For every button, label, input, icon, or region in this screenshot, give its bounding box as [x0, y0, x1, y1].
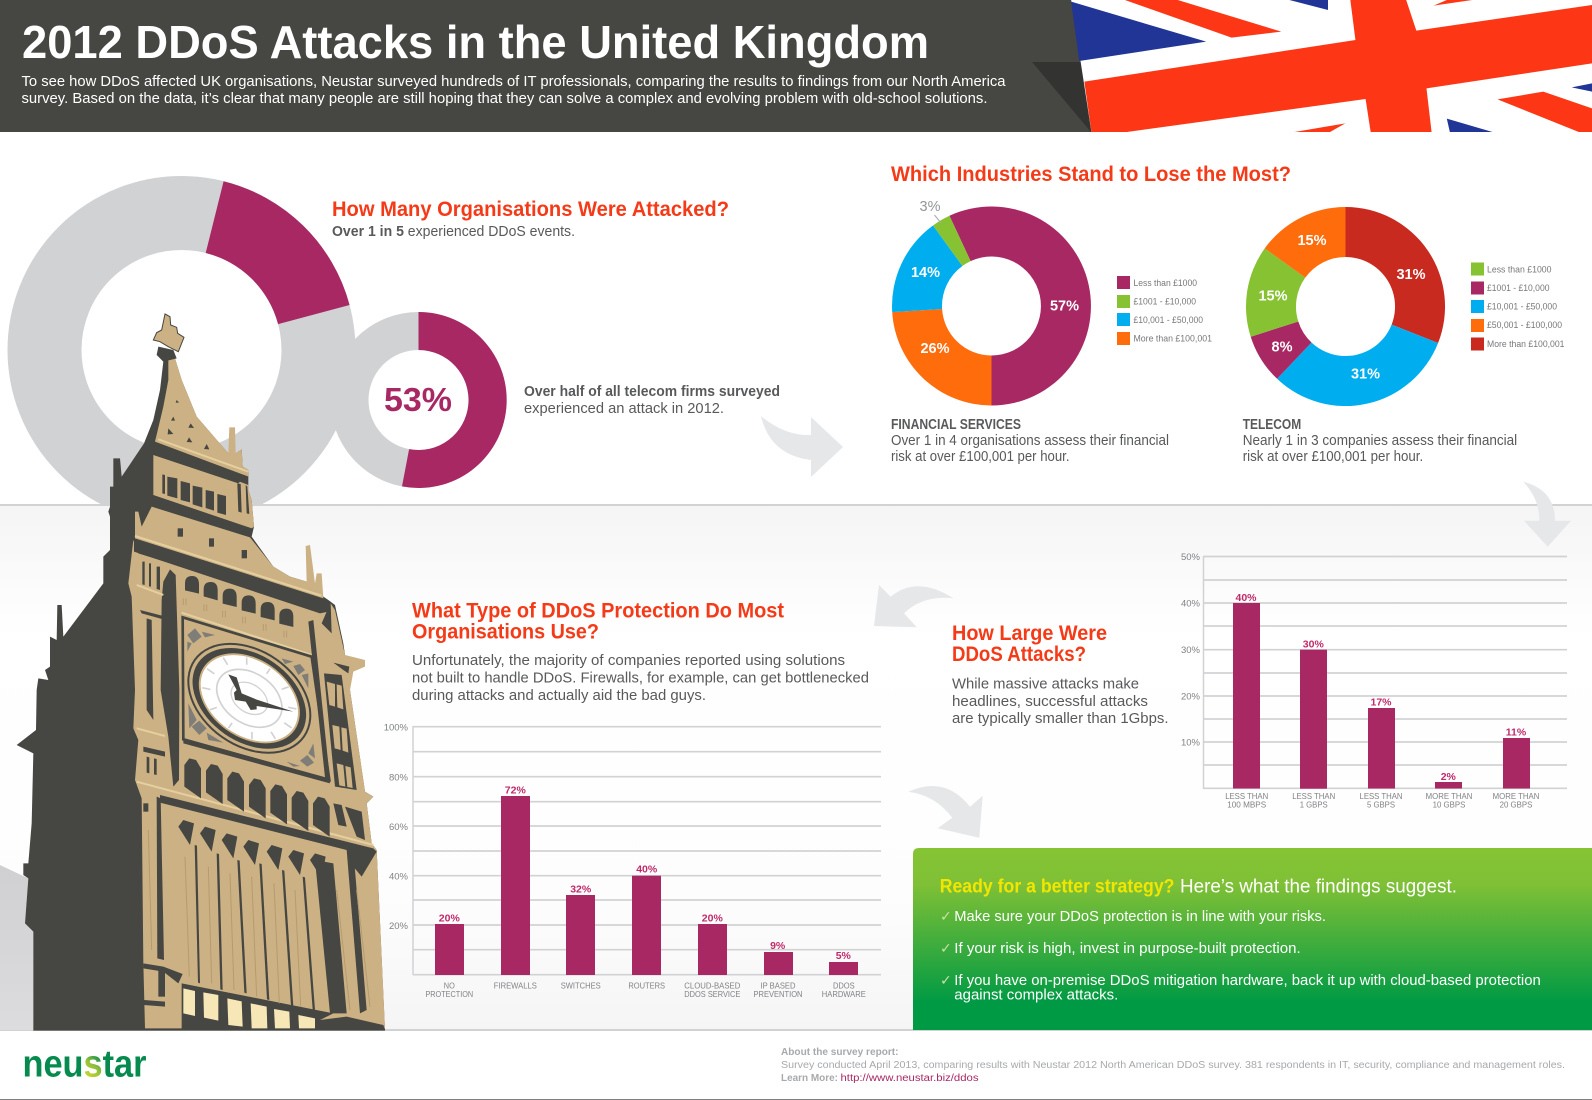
body text: While massive attacks make [952, 676, 1139, 692]
legend: telecom: £1001 - £10,000 [1487, 283, 1550, 294]
recommendation list: Make sure your DDoS protection is in line with your risks. [954, 908, 1326, 925]
bar chart: attack size: MORE THAN [1493, 791, 1539, 801]
body text: not built to handle DDoS. Firewalls, for example, can get bottlenecked [412, 670, 869, 686]
bar chart: attack size: 30% [1303, 638, 1324, 650]
panel: recommendations [913, 848, 1592, 1030]
caption: telecom: risk at over £100,001 per hour. [1243, 449, 1423, 465]
bar chart: protection type: 72% [505, 784, 526, 796]
neustar logo: neustar [22, 1044, 147, 1086]
clock hands [228, 674, 293, 712]
donut: telecom: 31% [1351, 366, 1380, 382]
clock face [166, 620, 332, 777]
caption: telecom: Nearly 1 in 3 companies assess their financial [1243, 433, 1517, 449]
tower tan masonry [128, 314, 385, 1028]
bar chart: protection type: 20% [439, 912, 460, 924]
big donut: 1 in 5 [44, 181, 350, 487]
small donut: 53%: 53% [384, 381, 452, 418]
panel: how many organisations were attacked [44, 181, 780, 488]
bar chart: attack size: 1 GBPS [1300, 800, 1328, 810]
header banner [0, 0, 1592, 132]
bar chart: protection type: 40% [389, 872, 409, 882]
bar chart: attack size: LESS THAN [1360, 791, 1402, 801]
recommendation list: against complex attacks. [954, 986, 1118, 1004]
light trim lines [135, 439, 373, 845]
legend: financial services: More than £100,001 [1134, 334, 1212, 344]
telecom note: experienced an attack in 2012. [524, 401, 724, 417]
panel: how large were DDoS attacks [952, 552, 1567, 810]
legend: telecom: £50,001 - £100,000 [1487, 320, 1562, 331]
bar chart: attack size: 17% [1370, 696, 1392, 708]
recommendation list: If you have on-premise DDoS mitigation hardware, back it up with cloud-based protection [954, 972, 1541, 989]
bar chart: attack size [1181, 552, 1567, 810]
bar chart: protection type: 80% [389, 772, 409, 784]
clock panel [166, 617, 332, 783]
masonry grooves [148, 830, 370, 1010]
bar chart: protection type: 20% [702, 912, 723, 924]
heading: How Many Organisations Were Attacked? [332, 198, 729, 221]
donut: telecom: 15% [1258, 288, 1288, 304]
lower shaft with pendants [143, 795, 385, 1030]
bar chart: protection type: PREVENTION [754, 989, 802, 999]
recommendations heading: Here’s what the findings suggest. [1180, 877, 1457, 898]
roof details and dark bands [134, 347, 328, 787]
flag ribbon fold [1032, 62, 1091, 132]
bar chart: attack size: 11% [1506, 726, 1527, 738]
bar chart: attack size: 50% [1181, 552, 1201, 563]
bar chart: attack size: 20 GBPS [1500, 800, 1533, 810]
legend: telecom [1471, 262, 1564, 350]
caption: telecom: TELECOM [1243, 417, 1301, 433]
heading: Which Industries Stand to Lose the Most? [891, 163, 1291, 186]
subheading: Over 1 in 5 experienced DDoS events. [332, 224, 575, 240]
donut: financial services: 3% [920, 199, 941, 215]
bar chart: attack size: LESS THAN [1225, 791, 1268, 801]
body text [412, 653, 869, 704]
Union Jack flag [1071, 0, 1592, 132]
caption: financial services [891, 417, 1169, 465]
legend: telecom: More than £100,001 [1487, 339, 1564, 350]
survey note: http://www.neustar.biz/ddos [840, 1073, 978, 1084]
bar chart: protection type [384, 722, 881, 999]
bar chart: protection type: 5% [836, 950, 852, 962]
bar chart: attack size: 5 GBPS [1367, 800, 1395, 810]
bar chart: attack size: 10% [1181, 738, 1201, 748]
heading: Organisations Use? [412, 620, 599, 644]
bar chart: protection type: HARDWARE [822, 989, 866, 999]
heading: DDoS Attacks? [952, 643, 1086, 666]
recommendation list: ✓ [940, 973, 952, 989]
legend: financial services: Less than £1000 [1134, 278, 1197, 289]
lower arches row [184, 758, 330, 837]
donut: financial services: 57% [1050, 298, 1079, 314]
right side windows [324, 663, 357, 790]
bar chart: protection type: CLOUD-BASED [684, 980, 740, 990]
body text: headlines, successful attacks [952, 694, 1148, 710]
recommendations heading [940, 877, 1457, 898]
bar chart: protection type: 60% [389, 822, 409, 833]
donut: financial services [892, 199, 1091, 406]
Big Ben tower illustration [0, 314, 385, 1031]
bar chart: protection type: 9% [770, 940, 786, 952]
survey note: Learn More: [781, 1073, 838, 1084]
body text: during attacks and actually aid the bad guys. [412, 688, 706, 704]
bar chart: protection type: 40% [636, 864, 658, 876]
neighbouring building [0, 865, 33, 1030]
heading: What Type of DDoS Protection Do Most [412, 600, 784, 622]
legend: financial services [1117, 276, 1212, 345]
bar chart: protection type: IP BASED [760, 980, 796, 990]
header title: 2012 DDoS Attacks in the United Kingdom [22, 16, 929, 68]
bar chart: protection type: 100% [384, 722, 409, 734]
legend: telecom: Less than £1000 [1487, 264, 1552, 276]
bar chart: protection type: 20% [389, 921, 409, 932]
bar chart: protection type: DDOS SERVICE [684, 989, 741, 999]
bar chart: protection type: FIREWALLS [494, 980, 537, 990]
small donut: 53% [350, 312, 507, 488]
donut: financial services: 14% [911, 265, 940, 281]
lower section background [0, 504, 1592, 1031]
bar chart: protection type: SWITCHES [561, 980, 601, 990]
lit windows [183, 988, 315, 1028]
arrow: to protection [874, 585, 953, 627]
header intro text: survey. Based on the data, it’s clear that many people are still hoping that they can solve a complex and evolving problem with old-school solutions. [22, 91, 987, 107]
heading [412, 600, 784, 644]
bar chart: attack size: 100 MBPS [1227, 800, 1267, 810]
tower silhouette [17, 350, 385, 1031]
recommendation list: ✓ [940, 941, 952, 957]
body text [952, 676, 1168, 727]
panel: what type of DDoS protection [384, 600, 881, 999]
bar chart: protection type: 32% [570, 884, 592, 896]
bar chart: protection type: NO [444, 980, 455, 990]
bar chart: attack size: 40% [1181, 598, 1201, 610]
footer [0, 1044, 1592, 1100]
caption: financial services: Over 1 in 4 organisations assess their financial [891, 433, 1169, 449]
body text: are typically smaller than 1Gbps. [952, 711, 1168, 727]
arrow: to industries [761, 416, 843, 477]
donut: telecom: 8% [1272, 340, 1293, 356]
bar chart: attack size: MORE THAN [1426, 791, 1472, 801]
donut: financial services: 26% [920, 341, 950, 357]
bar chart: protection type: DDOS [833, 980, 855, 990]
recommendations heading: Ready for a better strategy? [940, 877, 1174, 898]
caption: telecom [1243, 417, 1517, 465]
header intro text: To see how DDoS affected UK organisations, Neustar surveyed hundreds of IT professionals, comparing the results to findings from our North America [22, 74, 1006, 90]
survey note: About the survey report: [781, 1047, 898, 1058]
bar chart: attack size: 2% [1441, 771, 1457, 783]
bar chart: attack size: 40% [1235, 592, 1257, 604]
bar chart: attack size: 30% [1181, 645, 1201, 656]
legend: financial services: £10,001 - £50,000 [1134, 315, 1203, 326]
recommendation list: If your risk is high, invest in purpose-built protection. [954, 940, 1301, 957]
carved marks under arches [183, 598, 287, 637]
body text: Unfortunately, the majority of companies reported using solutions [412, 653, 845, 669]
donut: telecom: 15% [1297, 233, 1327, 249]
telecom note [524, 384, 780, 417]
arrow: to recommendations [908, 786, 983, 838]
bar chart: attack size: LESS THAN [1292, 791, 1335, 801]
arrow: to attack size [1523, 482, 1571, 547]
recommendation list: ✓ [940, 909, 952, 925]
survey note: Survey conducted April 2013, comparing results with Neustar 2012 North American DDoS survey. 381 respondents in IT, security, compliance and management roles. [781, 1060, 1565, 1071]
caption: financial services: risk at over £100,001 per hour. [891, 449, 1070, 465]
recommendation list [940, 908, 1541, 1004]
legend: financial services: £1001 - £10,000 [1134, 296, 1196, 308]
heading: How Large Were [952, 622, 1107, 645]
heading [952, 622, 1107, 666]
legend: telecom: £10,001 - £50,000 [1487, 302, 1557, 312]
caption: financial services: FINANCIAL SERVICES [891, 417, 1021, 433]
bar chart: attack size: 10 GBPS [1433, 800, 1466, 810]
bar chart: protection type: ROUTERS [628, 980, 665, 990]
panel: which industries stand to lose the most [891, 163, 1564, 465]
telecom note: Over half of all telecom firms surveyed [524, 384, 780, 400]
header intro text [22, 74, 1006, 107]
bar chart: attack size: 20% [1181, 692, 1201, 702]
donut: telecom [1246, 207, 1445, 406]
donut: telecom: 31% [1396, 267, 1426, 283]
bar chart: protection type: PROTECTION [425, 989, 473, 999]
survey note [781, 1047, 1565, 1084]
